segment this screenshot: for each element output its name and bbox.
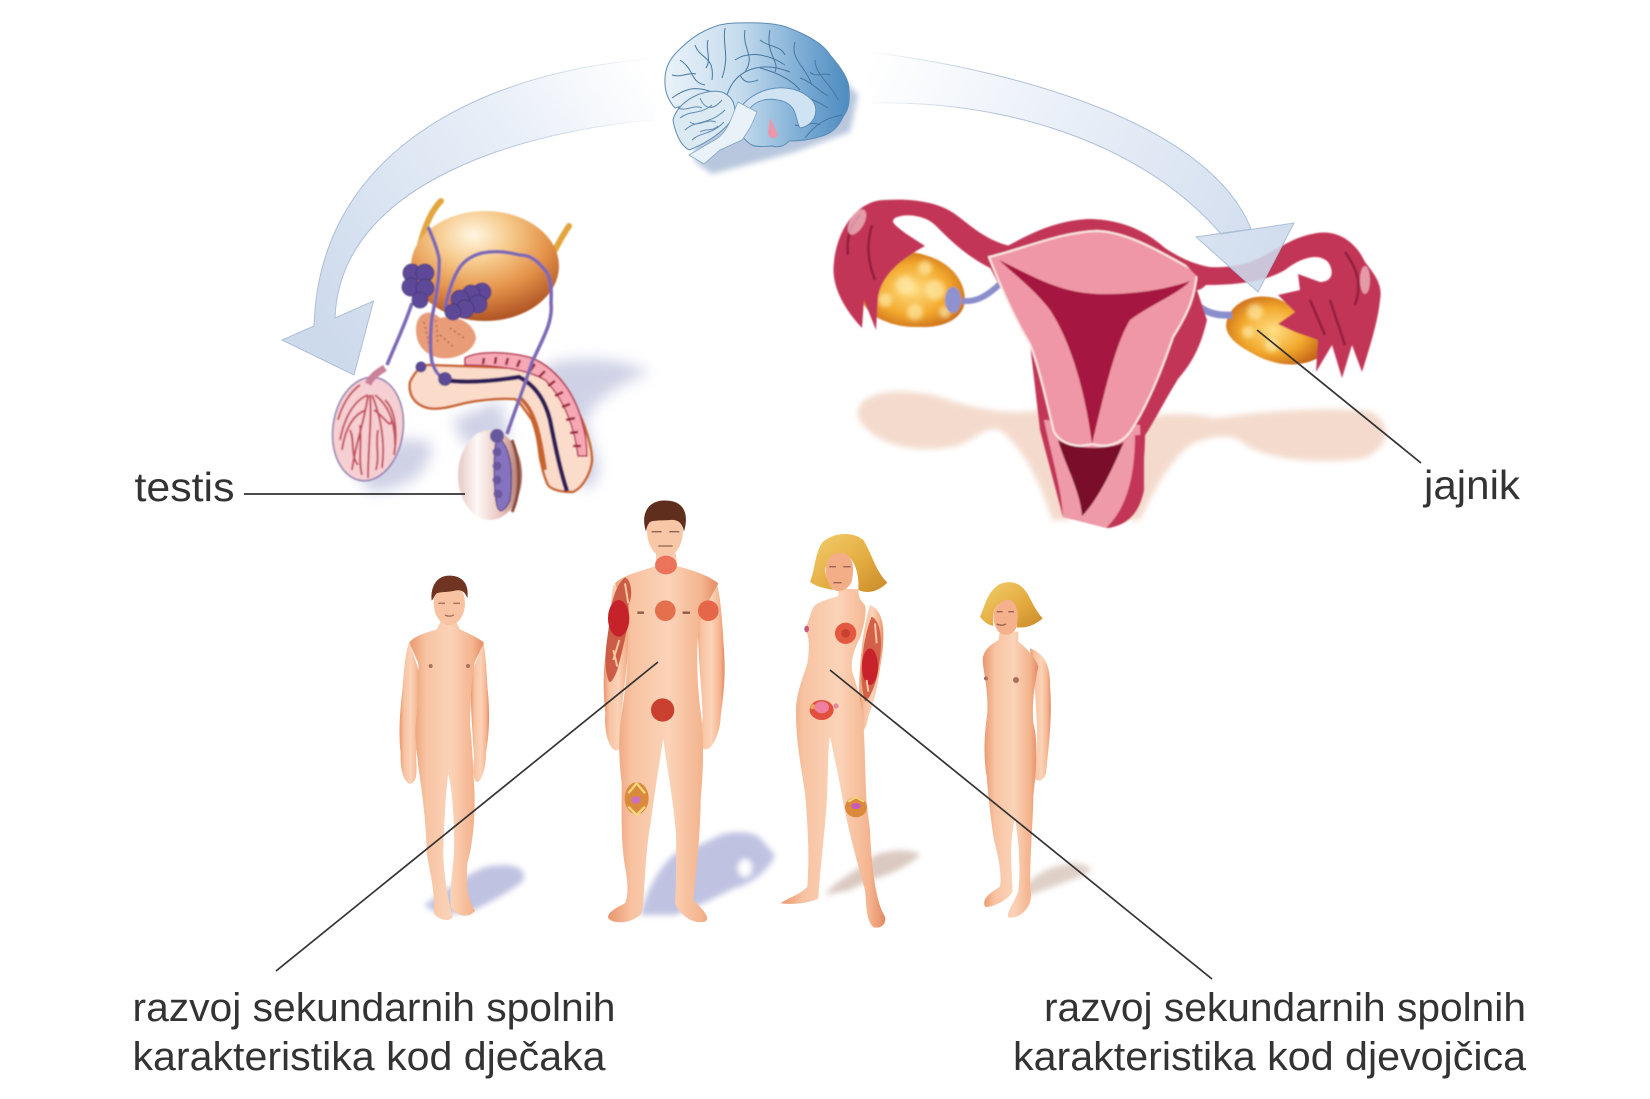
cerebrum	[665, 23, 849, 147]
leader line: testis	[244, 493, 465, 495]
man nipples	[637, 609, 690, 616]
penis section	[410, 353, 592, 492]
pituitary	[768, 118, 778, 138]
man hair	[644, 501, 686, 532]
man torso and legs	[608, 553, 718, 922]
shadow: woman	[825, 850, 920, 895]
caption: boys: karakteristika kod dječaka	[132, 1035, 606, 1079]
leader line: ovary	[1257, 330, 1421, 463]
caption: boys: razvoj sekundarnih spolnih	[132, 986, 616, 1030]
corpus callosum	[738, 88, 816, 128]
brain shadow	[690, 40, 858, 174]
man right arm	[695, 585, 725, 749]
woman face	[826, 553, 853, 591]
shadow: uterus	[858, 391, 1386, 520]
woman nipple side	[804, 626, 809, 632]
right fallopian tube	[1183, 232, 1381, 378]
girl body	[983, 632, 1038, 918]
female reproductive system	[833, 200, 1381, 528]
right ovary	[1226, 297, 1320, 365]
brain	[665, 23, 858, 174]
boy torso and legs	[409, 622, 484, 920]
uterus lining	[989, 231, 1197, 446]
woman body	[781, 588, 885, 928]
man groin patch	[651, 698, 674, 722]
cerebellum	[673, 91, 735, 150]
prostate	[416, 313, 476, 358]
woman hair	[810, 534, 887, 592]
arrow: brain to testis	[282, 58, 665, 375]
leader line: girls	[830, 670, 1212, 979]
man neck patch	[655, 556, 677, 574]
figure: girl	[980, 582, 1051, 918]
girl face	[993, 600, 1018, 635]
man arm muscles	[605, 577, 631, 682]
girl hair	[980, 582, 1043, 627]
shadow: boy	[424, 865, 524, 915]
label: jajnik: jajnik	[1423, 462, 1521, 508]
woman groin organ	[810, 700, 839, 720]
caption: boys	[132, 986, 616, 1079]
seminal vesicles	[402, 264, 491, 386]
woman knee joint	[845, 797, 867, 817]
testis section	[326, 368, 410, 485]
boy head	[434, 581, 465, 625]
label: testis: testis	[134, 464, 234, 510]
ureters	[420, 201, 569, 285]
sulci	[672, 28, 842, 138]
shadow: male organs	[354, 359, 650, 492]
man head	[647, 504, 683, 557]
male reproductive system	[326, 201, 592, 520]
caption: girls: karakteristika kod djevojčica	[1013, 1035, 1527, 1079]
left ligament	[962, 284, 1000, 301]
shadow: man	[640, 832, 775, 915]
woman breast patch	[835, 623, 856, 644]
man chest patch	[655, 600, 676, 621]
man knee joint	[625, 782, 649, 815]
figure: woman	[781, 534, 887, 928]
girl arm	[1030, 648, 1051, 781]
uterus outer wall	[985, 219, 1215, 528]
left fallopian tube	[833, 200, 1010, 330]
vas deferens tubes	[387, 227, 551, 434]
figure: man	[604, 501, 725, 922]
left ovary	[860, 252, 965, 327]
shadow: girl	[1020, 863, 1090, 895]
caption: girls	[1013, 986, 1527, 1079]
boy right arm	[471, 642, 489, 782]
testis	[458, 429, 522, 520]
bladder	[411, 211, 559, 321]
right ligament	[1196, 304, 1232, 315]
figure: boy	[400, 576, 489, 920]
cervix	[1044, 420, 1145, 528]
man left arm	[604, 585, 630, 751]
brain stem	[689, 102, 757, 164]
boy left arm	[400, 642, 421, 784]
man shoulder patch	[698, 600, 719, 621]
woman arm muscles	[861, 617, 881, 702]
woman arm	[859, 605, 883, 731]
boy hair	[431, 576, 468, 601]
uterine cavity	[999, 260, 1190, 444]
arrow: brain to ovary	[862, 51, 1294, 292]
caption: girls: razvoj sekundarnih spolnih	[1044, 986, 1526, 1030]
leader line: boys	[276, 662, 658, 971]
